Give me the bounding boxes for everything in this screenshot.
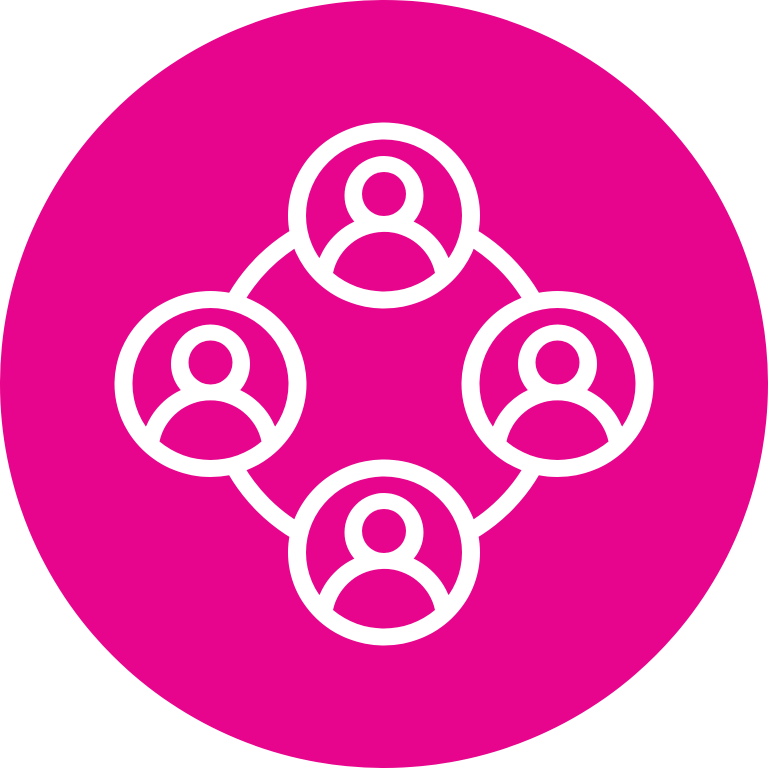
person: left [114, 291, 306, 477]
person: bottom [288, 460, 480, 646]
person: right [462, 291, 654, 477]
person: top [288, 122, 480, 308]
connecting ring [213, 213, 555, 555]
